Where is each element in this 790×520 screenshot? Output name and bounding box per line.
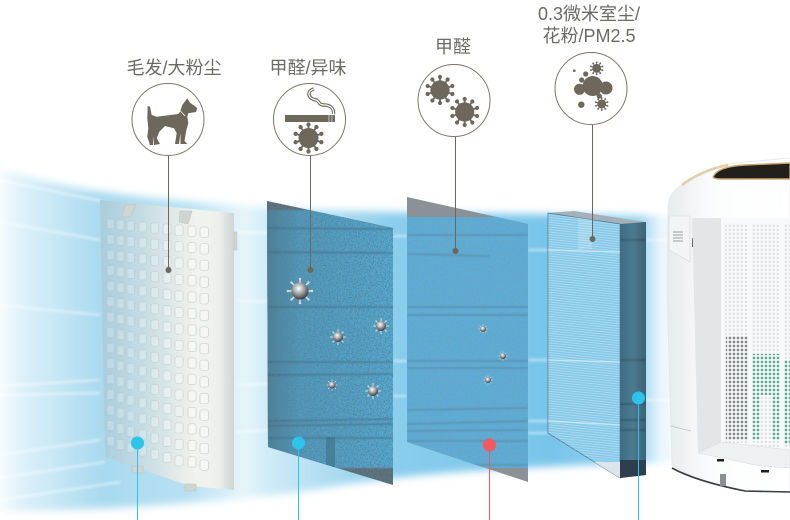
panel: deodorising mesh filter [262, 200, 398, 490]
label: formaldehyde: 甲醛 [435, 37, 471, 57]
icon: dog [132, 84, 204, 156]
marker: formaldehyde filter [483, 438, 496, 520]
green fan [752, 354, 780, 440]
panel: perforated pre-filter [100, 200, 237, 491]
side seam [671, 426, 691, 431]
panel 2 sheet [267, 201, 393, 485]
panel 1 clips and tabs [122, 204, 237, 491]
panel 2 germs [287, 278, 389, 399]
HEPA side face [620, 222, 646, 478]
HEPA front face [548, 213, 620, 478]
control panel [669, 216, 690, 262]
wheel [720, 474, 726, 486]
icon: two germs [418, 64, 490, 136]
label: formaldehyde and odour: 甲醛/异味 [269, 58, 347, 78]
cavity back [721, 218, 790, 450]
marker: pre-filter [131, 436, 144, 520]
purifier shell [667, 158, 790, 492]
cavity floor [698, 442, 790, 468]
marker: mesh filter [292, 436, 305, 520]
panel: HEPA filter block [548, 205, 646, 485]
pointer: odour to mesh [308, 156, 314, 273]
label: fine dust: 花粉/PM2.5 [542, 26, 636, 46]
HEPA top edge [548, 211, 646, 225]
vents [673, 232, 683, 241]
panel 1 body [100, 200, 234, 490]
label: hair and pollen: 毛发/大粉尘 [126, 58, 222, 78]
top window [713, 163, 790, 179]
floor slots [717, 459, 769, 472]
gold trim [682, 165, 728, 185]
grille [724, 223, 749, 448]
panel 3 sheet [407, 197, 528, 482]
base shadow [672, 468, 790, 492]
air purifier [667, 158, 790, 492]
icon: dust cloud [555, 52, 627, 124]
latch [692, 238, 695, 247]
pointer: dog to pre-filter [166, 156, 172, 273]
panel 1 holes [107, 219, 208, 470]
marker: HEPA filter [632, 392, 645, 520]
pointer: germs to filter [452, 137, 458, 254]
airflow background [0, 168, 680, 512]
cavity left wall [692, 218, 721, 453]
panel: formaldehyde filter [407, 195, 528, 485]
panel 3 germs [478, 324, 508, 385]
pointer: dust to HEPA [590, 125, 596, 242]
label: fine dust: 0.3微米室尘/ [538, 4, 640, 24]
icon: cigarette and germ [274, 84, 346, 156]
inner filter shadow [726, 336, 748, 440]
